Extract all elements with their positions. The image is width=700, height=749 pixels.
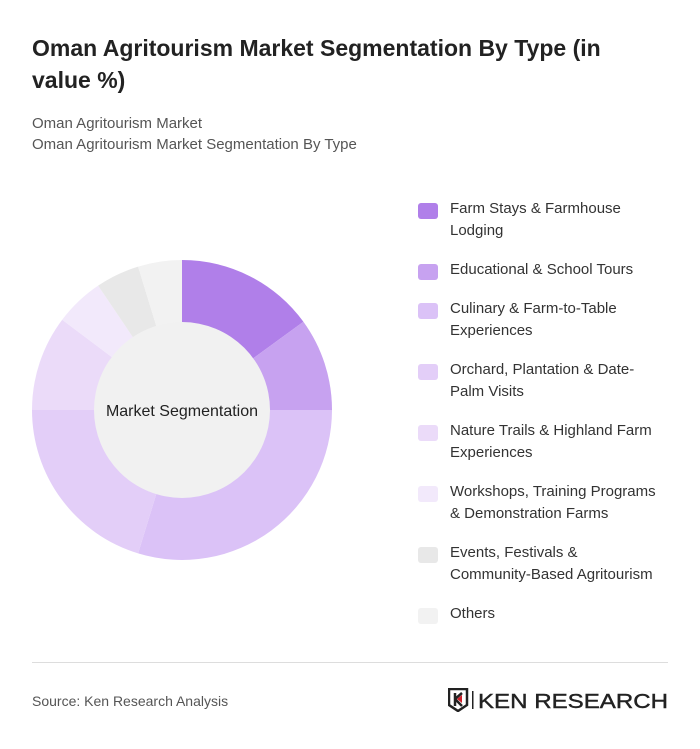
subtitle: Oman Agritourism Market Segmentation By Type xyxy=(32,136,357,153)
logo xyxy=(448,688,668,712)
legend: Culinary & Farm-to-Table Experiences xyxy=(450,300,617,339)
subtitle: Oman Agritourism Market xyxy=(32,115,202,132)
legend: Events, Festivals & Community-Based Agritourism xyxy=(450,544,653,583)
legend: Orchard, Plantation & Date-Palm Visits xyxy=(450,361,634,400)
title: Oman Agritourism Market Segmentation By Type (in value %) xyxy=(32,35,601,93)
subtitle xyxy=(32,115,357,153)
legend: Others xyxy=(450,605,495,622)
legend: Nature Trails & Highland Farm Experiences xyxy=(450,422,652,461)
legend: Educational & School Tours xyxy=(450,261,633,278)
legend: Farm Stays & Farmhouse Lodging xyxy=(450,200,621,239)
source: Source: Ken Research Analysis xyxy=(32,693,228,709)
legend: Workshops, Training Programs & Demonstration Farms xyxy=(450,483,656,522)
donut chart: Market Segmentation xyxy=(106,403,258,420)
legend xyxy=(418,200,656,624)
